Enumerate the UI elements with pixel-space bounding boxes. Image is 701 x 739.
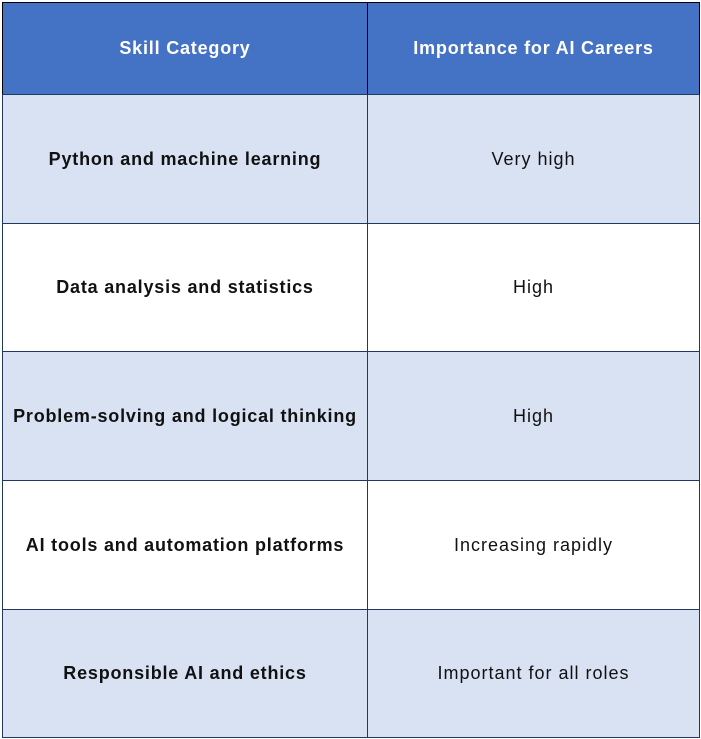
row 2 importance: High xyxy=(513,277,554,297)
row 4 importance: Increasing rapidly xyxy=(454,534,613,554)
row 1 importance: Very high xyxy=(491,148,576,168)
row 2 skill xyxy=(2,223,368,352)
header: importance: Importance for AI Careers xyxy=(413,38,654,58)
row 3 importance: High xyxy=(513,406,554,426)
row 3 skill: Problem-solving and logical thinking xyxy=(13,406,357,426)
header: importance xyxy=(367,2,700,95)
row 5 importance xyxy=(367,609,700,738)
row 5 importance: Important for all roles xyxy=(437,663,630,683)
row 5 skill xyxy=(2,609,368,738)
row 4 skill: AI tools and automation platforms xyxy=(26,534,344,554)
row 2 skill: Data analysis and statistics xyxy=(56,277,314,297)
row 3 importance xyxy=(367,351,700,481)
header: skill category xyxy=(2,2,368,95)
row 2 importance xyxy=(367,223,700,352)
row 4 skill xyxy=(2,480,368,610)
row 1 importance xyxy=(367,94,700,224)
row 4 importance xyxy=(367,480,700,610)
row 3 skill xyxy=(2,351,368,481)
row 5 skill: Responsible AI and ethics xyxy=(63,663,307,683)
header: skill category: Skill Category xyxy=(119,38,251,58)
row 1 skill: Python and machine learning xyxy=(49,148,321,168)
row 1 skill xyxy=(2,94,368,224)
